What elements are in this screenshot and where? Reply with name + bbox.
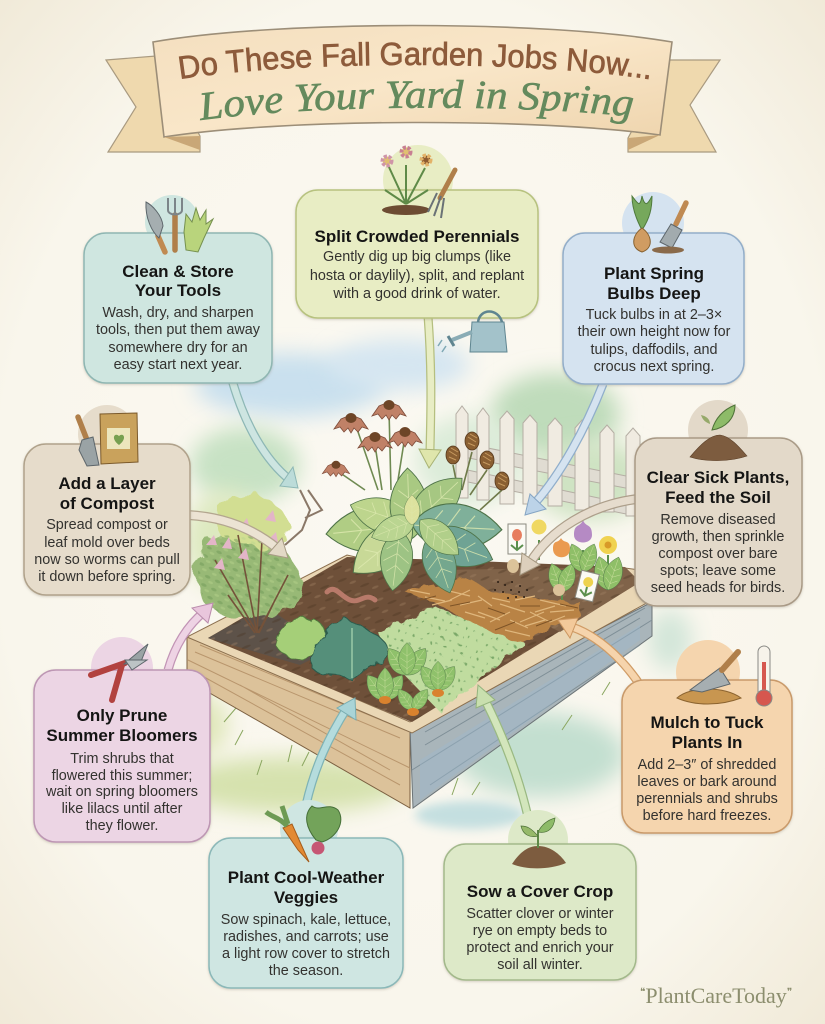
panel: plant spring bulbs deep <box>563 192 744 384</box>
shrub to prune <box>195 490 322 633</box>
heading line two: Love Your Yard in Spring <box>200 80 634 124</box>
cool-weather veggies in bed <box>275 618 461 716</box>
icon: bulb and trowel <box>632 196 686 254</box>
body text: tulips, daffodils, and <box>591 342 717 358</box>
icon: thermometer <box>756 646 772 706</box>
panel: split crowded perennials <box>296 145 538 318</box>
seed packet label: tulip <box>508 524 526 554</box>
arrow: compost to shrub <box>188 515 288 558</box>
body text: protect and enrich your <box>466 940 614 956</box>
body text: a light row cover to stretch <box>222 946 390 962</box>
panel: clear sick plants, feed the soil <box>635 400 802 606</box>
dried seed heads <box>446 432 509 510</box>
bed top rim <box>187 555 652 733</box>
heading: Add a Layer <box>58 474 156 493</box>
heading: Clear Sick Plants, <box>647 468 789 487</box>
tulips, daffodils and plant labels <box>507 520 627 602</box>
watercolor sky and foliage wash <box>172 339 692 829</box>
arrow: veggies to bed <box>306 698 356 805</box>
icon: carrot and radish <box>266 806 341 862</box>
arrow: mulch to strip <box>558 618 640 685</box>
body text: radishes, and carrots; use <box>223 929 389 945</box>
body text: soil all winter. <box>497 957 583 973</box>
heading line two: Feed the Soil <box>665 488 771 507</box>
soil <box>208 557 640 722</box>
heading: Split Crowded Perennials <box>314 227 520 246</box>
icon: garden tools <box>146 198 213 252</box>
body text: Wash, dry, and sharpen <box>102 305 254 321</box>
heading: Sow a Cover Crop <box>467 882 613 901</box>
icon: seedling in soil <box>512 818 566 868</box>
body text: their own height now for <box>578 324 731 340</box>
body text: crocus next spring. <box>594 359 714 375</box>
heading line two: Summer Bloomers <box>46 726 198 745</box>
body text: now so worms can pull <box>34 552 180 568</box>
icon: soil mound with sprout <box>690 405 747 461</box>
body text: Scatter clover or winter <box>466 906 614 922</box>
body text: spots; leave some <box>660 563 776 579</box>
bed left wall <box>187 637 410 808</box>
body text: Remove diseased <box>660 512 776 528</box>
arrow: sick plants to soil <box>520 499 637 575</box>
icon: scoop of mulch <box>677 652 741 704</box>
panel: add a layer of compost <box>24 405 190 595</box>
arrow: perennials to hosta <box>419 316 441 468</box>
icon: watering can <box>438 312 507 352</box>
brand watermark: PlantCareToday <box>645 983 787 1008</box>
body text: tools, then put them away <box>96 322 261 338</box>
body text: flowered this summer; <box>52 768 192 784</box>
body text: it down before spring. <box>38 569 176 585</box>
arrow: cover crop to patch <box>476 685 534 848</box>
arrow: prune to shrub <box>168 603 213 670</box>
body text: like lilacs until after <box>62 801 183 817</box>
ribbon left tail <box>106 56 200 152</box>
brand watermark: ❞ <box>787 987 792 998</box>
heading line two: of Compost <box>60 494 155 513</box>
heading line two: Plants In <box>672 733 742 752</box>
panel: mulch to tuck plants in <box>622 640 792 833</box>
body text: leaf mold over beds <box>44 535 170 551</box>
panel: clean and store tools <box>84 195 272 383</box>
icon: compost bag and trowel <box>78 413 138 466</box>
body text: rye on empty beds to <box>473 923 607 939</box>
heading line two: Your Tools <box>135 281 221 300</box>
heading: Only Prune <box>77 706 167 725</box>
body text: with a good drink of water. <box>332 286 501 302</box>
body text: hosta or daylily), split, and replant <box>310 268 524 284</box>
bed right wall <box>410 602 652 808</box>
icon: perennial flowers and fork <box>382 148 455 218</box>
body text: leaves or bark around <box>637 774 777 790</box>
mulch strip <box>403 578 582 644</box>
raised bed <box>187 555 652 808</box>
heading: Plant Cool-Weather <box>228 868 385 887</box>
icon: pruning shears <box>91 644 148 700</box>
body text: growth, then sprinkle <box>652 529 784 545</box>
ribbon right tail <box>628 60 720 152</box>
heading: Mulch to Tuck <box>650 713 764 732</box>
heading: Plant Spring <box>604 264 704 283</box>
body text: Sow spinach, kale, lettuce, <box>221 912 391 928</box>
body text: compost over bare <box>658 546 778 562</box>
seed sprinkle on soil <box>495 582 527 598</box>
panel: only prune summer bloomers <box>34 637 210 842</box>
body text: they flower. <box>86 818 158 834</box>
body text: the season. <box>269 963 343 979</box>
body text: easy start next year. <box>114 357 242 373</box>
seed packet label: daffodil <box>575 570 599 602</box>
main ribbon <box>153 26 672 137</box>
earthworm <box>327 589 375 601</box>
body text: perennials and shrubs <box>636 791 778 807</box>
body text: Trim shrubs that <box>70 751 174 767</box>
heading line two: Bulbs Deep <box>607 284 701 303</box>
ribbon folds <box>164 135 660 150</box>
body text: Add 2–3″ of shredded <box>638 757 776 773</box>
body text: Gently dig up big clumps (like <box>323 249 511 265</box>
body text: before hard freezes. <box>643 808 771 824</box>
body text: Tuck bulbs in at 2–3× <box>586 307 722 323</box>
coneflowers <box>322 400 422 490</box>
body text: somewhere dry for an <box>108 340 248 356</box>
body text: wait on spring bloomers <box>45 784 198 800</box>
heading line two: Veggies <box>274 888 338 907</box>
body text: Spread compost or <box>46 517 168 533</box>
panel: sow a cover crop <box>444 810 636 980</box>
arrow: bulbs to bed <box>525 384 603 515</box>
heading: Clean & Store <box>122 262 234 281</box>
cover crop patch <box>378 606 525 712</box>
heading line one: Do These Fall Garden Jobs Now... <box>178 42 650 80</box>
picket fence <box>456 406 640 516</box>
body text: seed heads for birds. <box>651 580 785 596</box>
panel: plant cool-weather veggies <box>209 800 403 988</box>
arrow: tools to garden <box>232 380 298 488</box>
brand watermark: ❝ <box>640 987 645 998</box>
title banner <box>105 24 721 153</box>
hosta plant <box>324 465 503 598</box>
